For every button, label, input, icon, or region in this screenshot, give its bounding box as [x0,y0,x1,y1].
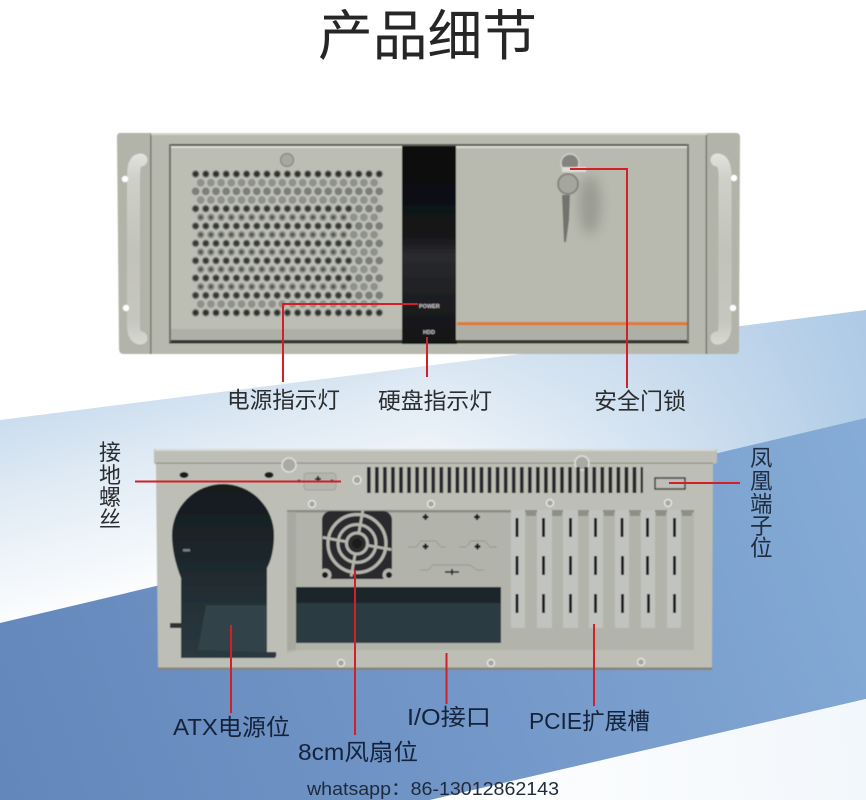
contact line: whatsapp: whatsapp：86-13012862143 [306,779,559,799]
left mesh door [171,146,402,340]
recessed expansion area [287,504,694,653]
phoenix terminal cutout [655,478,685,489]
small screws [308,476,672,666]
HDD label: HDD [423,330,435,336]
label: phoenix terminal (vertical) [750,446,773,561]
label: ATX power bay: ATX电源位 [173,714,290,740]
label: grounding screw (vertical): 接 [99,440,121,465]
ATX power supply opening [170,484,276,658]
POWER label: POWER [419,304,440,310]
left handle [122,160,141,338]
rear chassis photo [154,449,717,670]
front chassis photo [117,133,740,354]
fan grille [317,504,397,583]
label: power indicator: 电源指示灯 [227,388,340,413]
perforated vent [192,170,384,317]
label: HDD indicator: 硬盘指示灯 [378,389,492,414]
red callout lines [135,169,740,735]
label: 8cm fan position: 8cm风扇位 [298,739,418,765]
chassis body [151,134,707,354]
top thumbscrews [180,456,589,478]
title: 产品细节 [318,6,537,67]
left mounting ear [117,133,151,354]
label: grounding screw (vertical): 丝 [99,507,121,532]
label: grounding screw (vertical) [99,440,121,532]
label: phoenix terminal (vertical): 凤 [750,446,773,471]
label: PCIE expansion slots: PCIE扩展槽 [529,708,650,734]
label: phoenix terminal (vertical): 端 [750,492,773,517]
IO opening [296,587,501,643]
connector knockouts [408,514,497,575]
black indicator panel [402,146,457,344]
PCIE slot covers [511,510,692,628]
serial cutout [298,473,336,490]
chassis back plate [154,449,717,670]
right lock door [456,146,687,340]
lock and key [558,154,586,242]
label: phoenix terminal (vertical): 位 [750,536,773,561]
label: phoenix terminal (vertical): 凰 [750,469,773,494]
label: grounding screw (vertical): 螺 [99,485,121,510]
right handle [717,160,737,338]
door screw [280,154,294,166]
label: safety door lock: 安全门锁 [594,388,686,414]
right mounting ear [706,133,740,354]
label: IO port: I/O接口 [407,704,491,730]
label: phoenix terminal (vertical): 子 [750,514,773,539]
label: grounding screw (vertical): 地 [99,463,121,488]
top vent slots [367,467,643,493]
